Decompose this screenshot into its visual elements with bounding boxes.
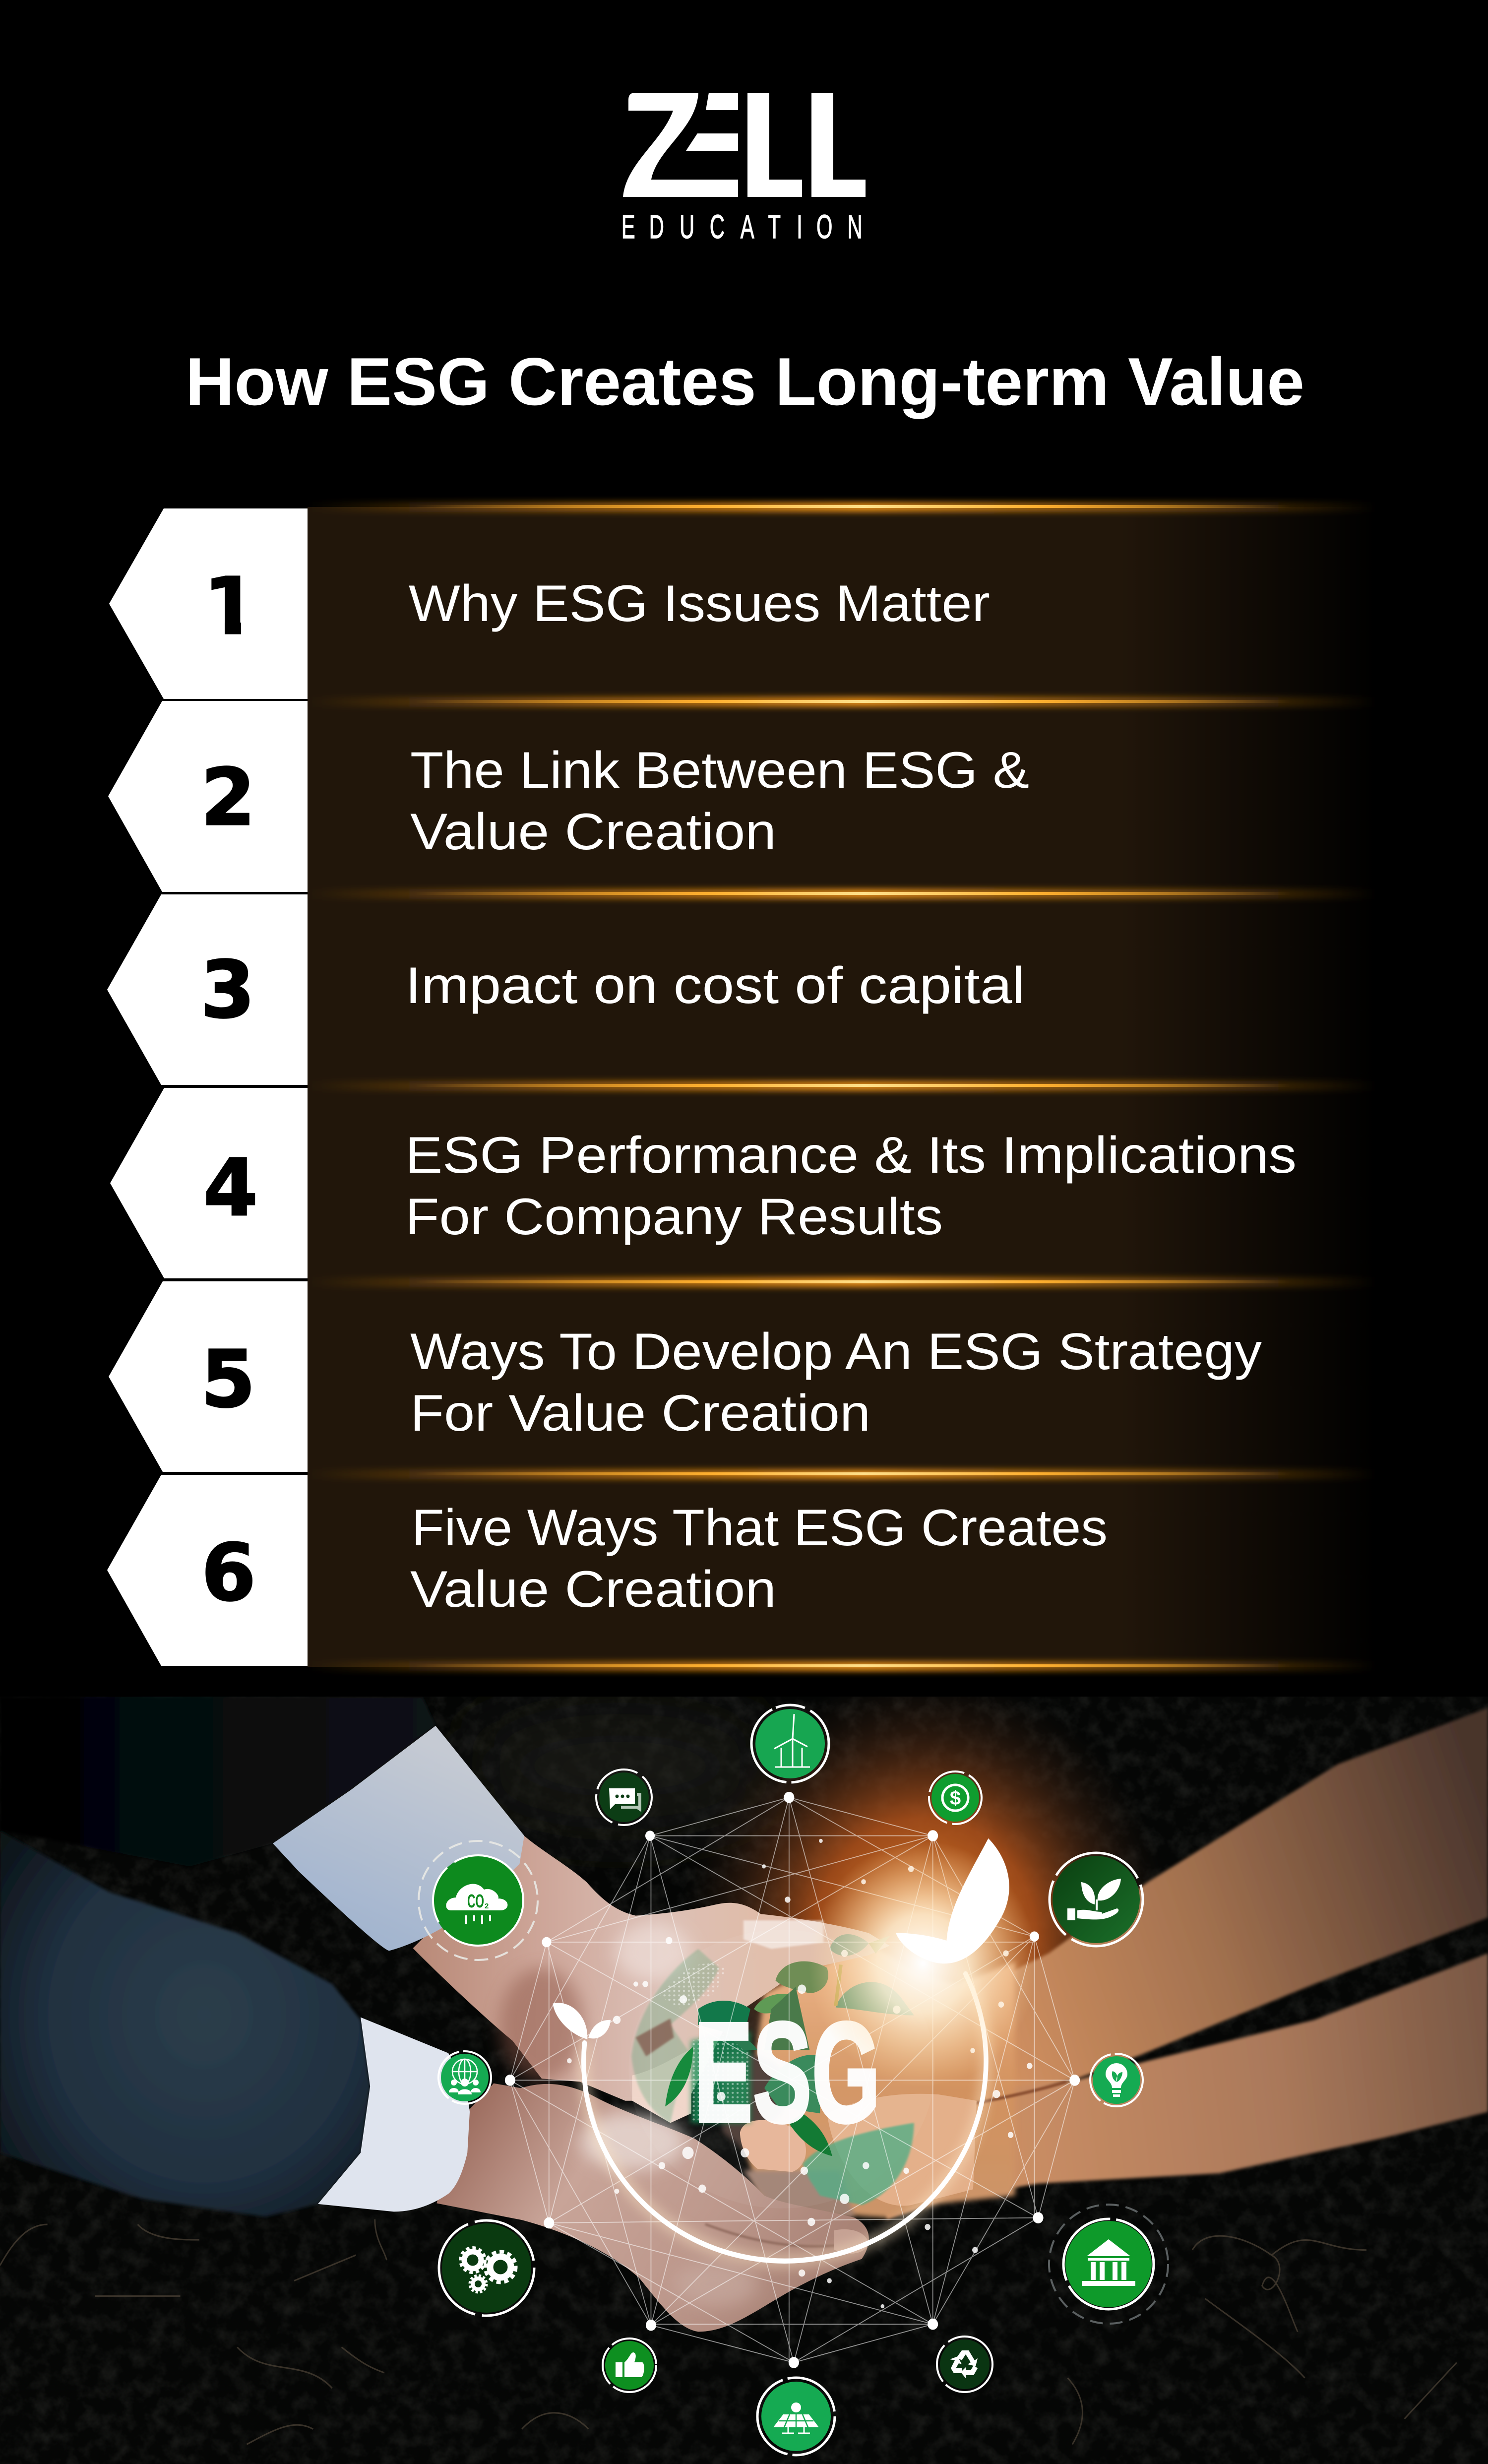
badge 2 xyxy=(108,701,308,892)
photo: hands cradling a plant with ESG network overlay xyxy=(0,1672,1488,2464)
row 5 text: Ways To Develop An ESG Strategy xyxy=(410,1323,1262,1381)
row 6 text: Five Ways That ESG Creates xyxy=(412,1499,1108,1557)
ESG lettering: ESG xyxy=(694,1993,880,2152)
particles xyxy=(567,1839,1033,2308)
icon: dollar coin: $ xyxy=(950,1787,961,1809)
badge 1 xyxy=(109,508,308,699)
row 2 text: Value Creation xyxy=(410,803,776,861)
icon: bank xyxy=(1049,2205,1168,2324)
right arm: upper xyxy=(1011,1707,1488,2089)
globe map tints xyxy=(628,1930,935,2209)
child's hands, right xyxy=(744,1943,1015,2218)
list of six value items xyxy=(107,507,1376,1667)
title: How ESG Creates Long-term Value xyxy=(186,344,1304,419)
logo: Zell Education: EDUCATION xyxy=(621,208,863,245)
glowing leaf xyxy=(809,1838,1037,2086)
dark suit sleeve, upper arm xyxy=(0,1697,435,1866)
icon: chat bubbles xyxy=(596,1769,652,1825)
badge 6 xyxy=(107,1475,308,1666)
icon: hand holding plant xyxy=(1050,1853,1143,1946)
icon: CO2 cloud: 2 xyxy=(485,1902,489,1910)
row 6 text: Value Creation xyxy=(410,1561,776,1618)
row 1: why ESG issues matter xyxy=(109,507,1376,702)
hands and globe, centre xyxy=(413,1836,1066,2332)
network lines xyxy=(510,1797,1075,2362)
badge 3 xyxy=(107,894,308,1085)
shirt cuff, upper xyxy=(273,1726,524,1951)
row 1 text: Why ESG Issues Matter xyxy=(409,575,990,632)
adult hand, lower xyxy=(436,2084,869,2332)
centre soil and fist xyxy=(723,2054,789,2151)
row 6: five ways that ESG creates value creation xyxy=(107,1474,1376,1667)
icon: globe with people xyxy=(438,2051,491,2104)
row 6 text xyxy=(410,1499,1108,1618)
row 2 text: The Link Between ESG & xyxy=(410,742,1029,799)
row 4 text xyxy=(405,1127,1297,1246)
badge 3: 3 xyxy=(200,945,255,1036)
icon: dollar coin xyxy=(929,1771,982,1824)
icon: gears xyxy=(439,2220,534,2316)
soil roots xyxy=(0,2219,1457,2444)
row 5 text xyxy=(410,1323,1262,1442)
row 5 text: For Value Creation xyxy=(410,1385,870,1442)
sprout at arc start xyxy=(553,2003,611,2039)
badge 1: 1 xyxy=(203,561,258,652)
icon: recycle xyxy=(937,2337,992,2392)
badge 5: 5 xyxy=(201,1334,255,1425)
icon: wind turbines xyxy=(751,1705,829,1782)
icon: light bulb xyxy=(1090,2054,1143,2106)
orange glow behind the leaf xyxy=(701,1697,1143,2081)
icon: CO2 cloud: CO xyxy=(467,1891,484,1912)
navy suit sleeve, lower arm xyxy=(0,1831,370,2217)
shirt cuff, lower xyxy=(318,2018,470,2211)
badge 2: 2 xyxy=(201,752,255,843)
network nodes xyxy=(505,1792,1080,2368)
row 2: the link between ESG and value creation xyxy=(108,701,1376,894)
icon: solar panel xyxy=(757,2378,835,2455)
glowing circular arc xyxy=(584,1974,986,2261)
icon: thumbs up xyxy=(603,2338,656,2392)
row 4 text: ESG Performance & Its Implications xyxy=(405,1127,1297,1184)
row 5: ways to develop an ESG strategy xyxy=(109,1281,1376,1474)
badge 5 xyxy=(109,1281,308,1472)
badge 6: 6 xyxy=(201,1527,256,1619)
row 3: impact on cost of capital xyxy=(107,894,1376,1086)
row 4: ESG performance xyxy=(110,1086,1376,1282)
icon: CO2 cloud xyxy=(419,1841,538,1960)
row 4 text: For Company Results xyxy=(405,1188,943,1246)
right arm: lower xyxy=(854,1954,1488,2219)
logo: Zell Education xyxy=(621,93,866,245)
row 2 text xyxy=(410,742,1029,861)
badge 4 xyxy=(110,1088,308,1278)
row 3 text: Impact on cost of capital xyxy=(405,957,1025,1014)
adult hand, upper xyxy=(413,1836,890,2101)
badge 4: 4 xyxy=(203,1142,258,1234)
plant leaves xyxy=(665,1934,914,2156)
